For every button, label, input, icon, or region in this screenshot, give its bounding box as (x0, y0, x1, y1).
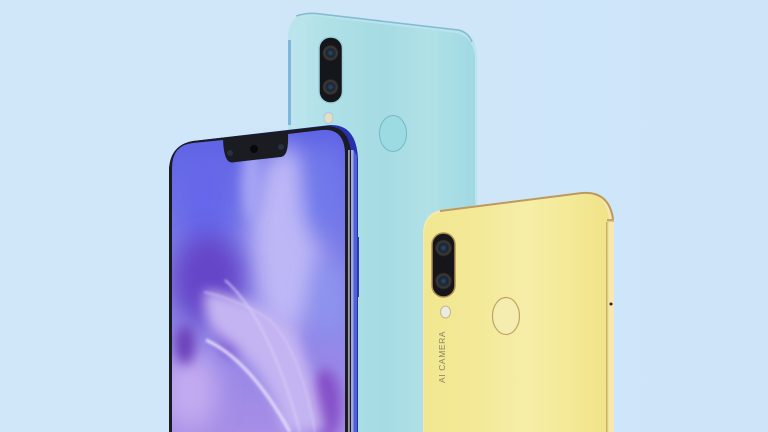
teal phone body (288, 12, 477, 432)
phone: yellow back (423, 192, 614, 432)
front phone notch sensors (227, 144, 284, 156)
yellow phone AI camera label: AI CAMERA (437, 331, 447, 383)
yellow phone fingerprint sensor (492, 298, 520, 334)
front phone side buttons (357, 237, 359, 297)
teal phone flash (324, 112, 333, 124)
infographic: three smartphones on a light blue background (169, 12, 614, 432)
yellow phone side port (610, 302, 612, 306)
front phone frame (169, 125, 358, 432)
phone: front with notch (162, 125, 359, 432)
yellow phone flash (440, 306, 450, 318)
yellow phone body (423, 192, 614, 432)
teal phone fingerprint sensor (380, 116, 406, 152)
front phone screen (162, 125, 346, 432)
yellow phone camera (432, 233, 455, 297)
phone: teal back (288, 12, 477, 432)
teal phone camera (319, 37, 342, 103)
